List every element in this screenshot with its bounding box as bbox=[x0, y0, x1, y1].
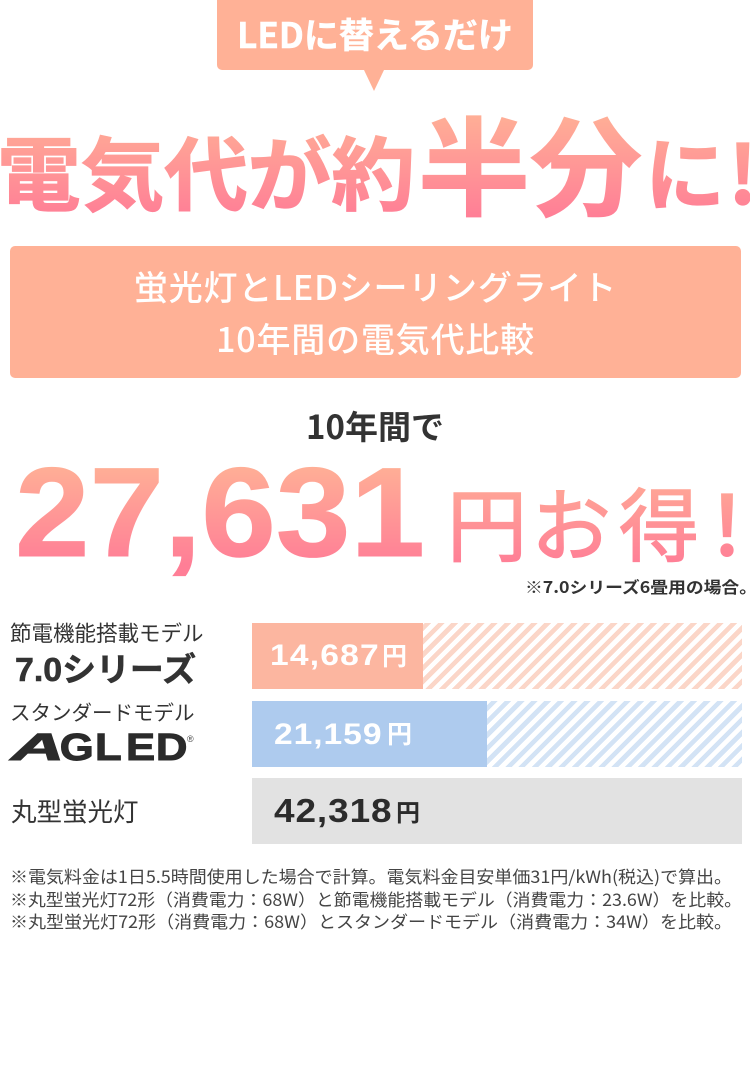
label: スタンダードモデル AGLED: ® bbox=[187, 734, 194, 744]
headline: 電気代が約半分に!: に bbox=[645, 112, 725, 228]
bar: 21,159: 円 bbox=[387, 715, 412, 751]
bar: 42,318 bbox=[252, 778, 742, 844]
label: 節電機能搭載モデル 7.0シリーズ bbox=[10, 617, 204, 688]
footnote: 7.0 series: ※7.0シリーズ6畳用の場合。 bbox=[525, 574, 750, 598]
panel: comparison heading: 10年間の電気代比較 bbox=[216, 313, 535, 362]
big savings figure: お bbox=[531, 463, 611, 579]
label: スタンダードモデル AGLED: A bbox=[8, 726, 65, 768]
big savings figure: 円 bbox=[447, 463, 527, 579]
headline: 電気代が約半分に!: 電気代が約 bbox=[0, 112, 415, 228]
callout: LEDに替えるだけ bbox=[217, 0, 533, 91]
footnotes: ※丸型蛍光灯72形（消費電力：68W）と節電機能搭載モデル（消費電力：23.6W）を比較。 bbox=[10, 886, 742, 911]
panel: comparison heading: 蛍光灯とLEDシーリングライト bbox=[134, 261, 617, 310]
label: スタンダードモデル AGLED bbox=[8, 696, 194, 768]
bar: 42,318: 円 bbox=[396, 793, 420, 828]
callout: LEDに替えるだけ: LEDに替えるだけ bbox=[237, 8, 513, 59]
bar: 21,159: 21,159 bbox=[274, 717, 382, 751]
big savings figure: 27,631 bbox=[15, 441, 425, 583]
headline: 電気代が約半分に! bbox=[0, 83, 750, 238]
bar: 42,318: 42,318 bbox=[274, 793, 392, 830]
label: スタンダードモデル AGLED: GLED bbox=[60, 726, 188, 768]
panel: comparison heading bbox=[10, 246, 741, 378]
footnotes: ※丸型蛍光灯72形（消費電力：68W）とスタンダードモデル（消費電力：34W）を比較。 bbox=[10, 908, 732, 933]
label: 節電機能搭載モデル 7.0シリーズ: 7.0シリーズ bbox=[15, 651, 196, 688]
bar: 14,687: 14,687 bbox=[270, 638, 379, 672]
footnotes: ※電気料金は1日5.5時間使用した場合で計算。電気料金目安単価31円/kWh(税込)で算出。 bbox=[10, 863, 732, 888]
big savings figure bbox=[15, 441, 750, 583]
headline: 電気代が約半分に!: 半分 bbox=[418, 83, 642, 238]
bar: 21,159 bbox=[252, 701, 742, 767]
bar: 14,687 bbox=[252, 623, 742, 689]
label: スタンダードモデル AGLED: スタンダードモデル bbox=[10, 696, 194, 726]
label: 丸型蛍光灯: 丸型蛍光灯 bbox=[11, 792, 139, 829]
subheading: 10年間で: 10年間で bbox=[306, 401, 444, 449]
bar: 14,687: 円 bbox=[382, 637, 407, 673]
big savings figure: 得 bbox=[619, 463, 699, 579]
footnotes bbox=[10, 863, 742, 933]
label: 節電機能搭載モデル 7.0シリーズ: 節電機能搭載モデル bbox=[10, 617, 204, 648]
